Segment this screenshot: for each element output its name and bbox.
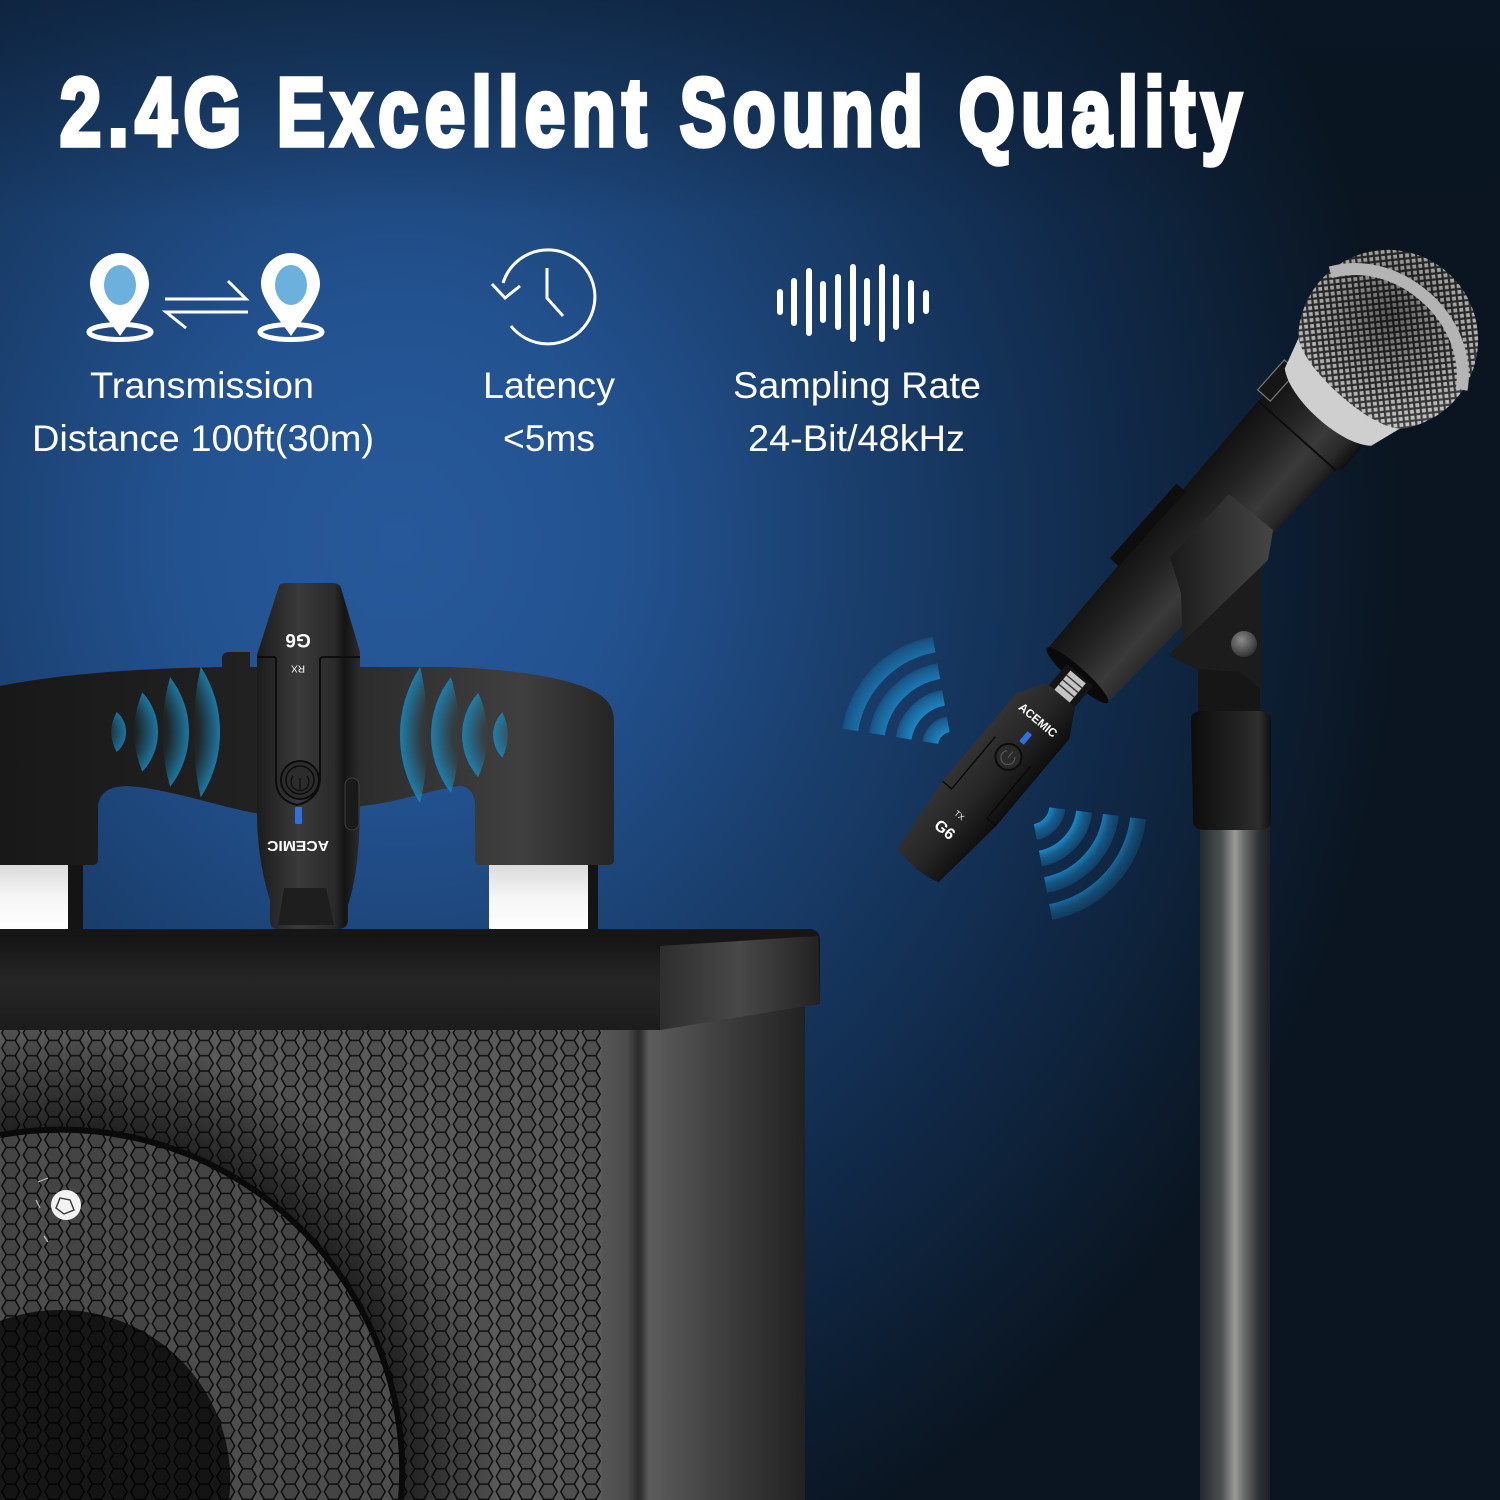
stand neck (1198, 665, 1260, 720)
receiver body (257, 583, 360, 929)
transmitter body (888, 672, 1087, 890)
grille shading (1269, 213, 1500, 458)
transmitter panel line (942, 729, 1040, 826)
transmitter model text G6: G6 (931, 817, 958, 844)
title: Quality (959, 59, 1248, 166)
mount bolt (1231, 631, 1257, 657)
speaker woofer cone (0, 1310, 230, 1500)
mic body (1039, 370, 1367, 718)
speaker handle feet (0, 862, 598, 932)
icon: two location pins with arrows (89, 253, 322, 340)
waves: right of receiver (400, 667, 508, 803)
transmitter brand text: ACEMIC (1016, 700, 1060, 741)
microphone (1011, 213, 1500, 747)
speaker logo (36, 1178, 81, 1242)
label: transmission distance: Distance 100ft(30m) (32, 418, 374, 459)
speaker grille (0, 1030, 601, 1500)
stand pole (1200, 815, 1270, 1500)
mic body step (1259, 402, 1336, 470)
waves: upper left (850, 644, 948, 743)
mic clip sleeve (1170, 494, 1273, 642)
label: latency (483, 365, 616, 459)
label: sampling rate (733, 365, 981, 459)
microphone stand (1168, 566, 1271, 1500)
feature: sampling rate (733, 267, 981, 459)
title (60, 59, 1248, 166)
mic clip mount (1168, 566, 1262, 690)
speaker side panel (600, 1000, 805, 1500)
label: latency: <5ms (503, 418, 595, 459)
receiver LED (295, 807, 302, 824)
mic silver band upper (1330, 239, 1492, 390)
receiver USB port (345, 778, 359, 830)
icon: sound waveform (780, 267, 926, 339)
signal waves around receiver (111, 667, 508, 803)
waves: lower right (1035, 808, 1138, 912)
device: RX receiver on speaker handle (257, 583, 360, 929)
receiver model text G6: G6 (285, 629, 311, 650)
label: transmission distance: Transmission (90, 365, 314, 406)
device: TX transmitter on microphone (888, 651, 1105, 890)
mic silver ring (1267, 338, 1400, 464)
speaker handle (0, 652, 614, 865)
title: Excellent (277, 59, 653, 166)
stand collar (1191, 711, 1271, 830)
mic switch (1258, 360, 1297, 401)
title: Sound (680, 59, 929, 166)
speaker lid (0, 929, 820, 1030)
receiver RX label: RX (291, 662, 305, 674)
mic bottom rim (1042, 642, 1113, 709)
title: 2.4G (60, 59, 248, 166)
receiver power button (281, 761, 319, 799)
feature: transmission distance (32, 253, 374, 459)
receiver XLR end (278, 888, 334, 925)
icon: clock with counter-clockwise arrow (492, 250, 595, 344)
speaker woofer ring (0, 1130, 402, 1500)
label: sampling rate: Sampling Rate (733, 365, 981, 406)
feature: latency (483, 250, 616, 459)
mic side slider (1110, 484, 1185, 566)
transmitter power button (990, 739, 1027, 775)
mic grille head (1269, 213, 1500, 458)
receiver brand text: ACEMIC (267, 837, 329, 854)
transmitter LED (1019, 731, 1032, 745)
waves: left of receiver (111, 667, 220, 797)
speaker (0, 652, 820, 1500)
signal waves around transmitter (850, 644, 1138, 912)
receiver front panel (257, 657, 360, 805)
label: sampling rate: 24-Bit/48kHz (748, 418, 965, 459)
label: transmission distance (32, 365, 374, 459)
label: latency: Latency (483, 365, 616, 406)
transmitter TX label: TX (952, 809, 967, 823)
XLR pins (1045, 664, 1093, 712)
